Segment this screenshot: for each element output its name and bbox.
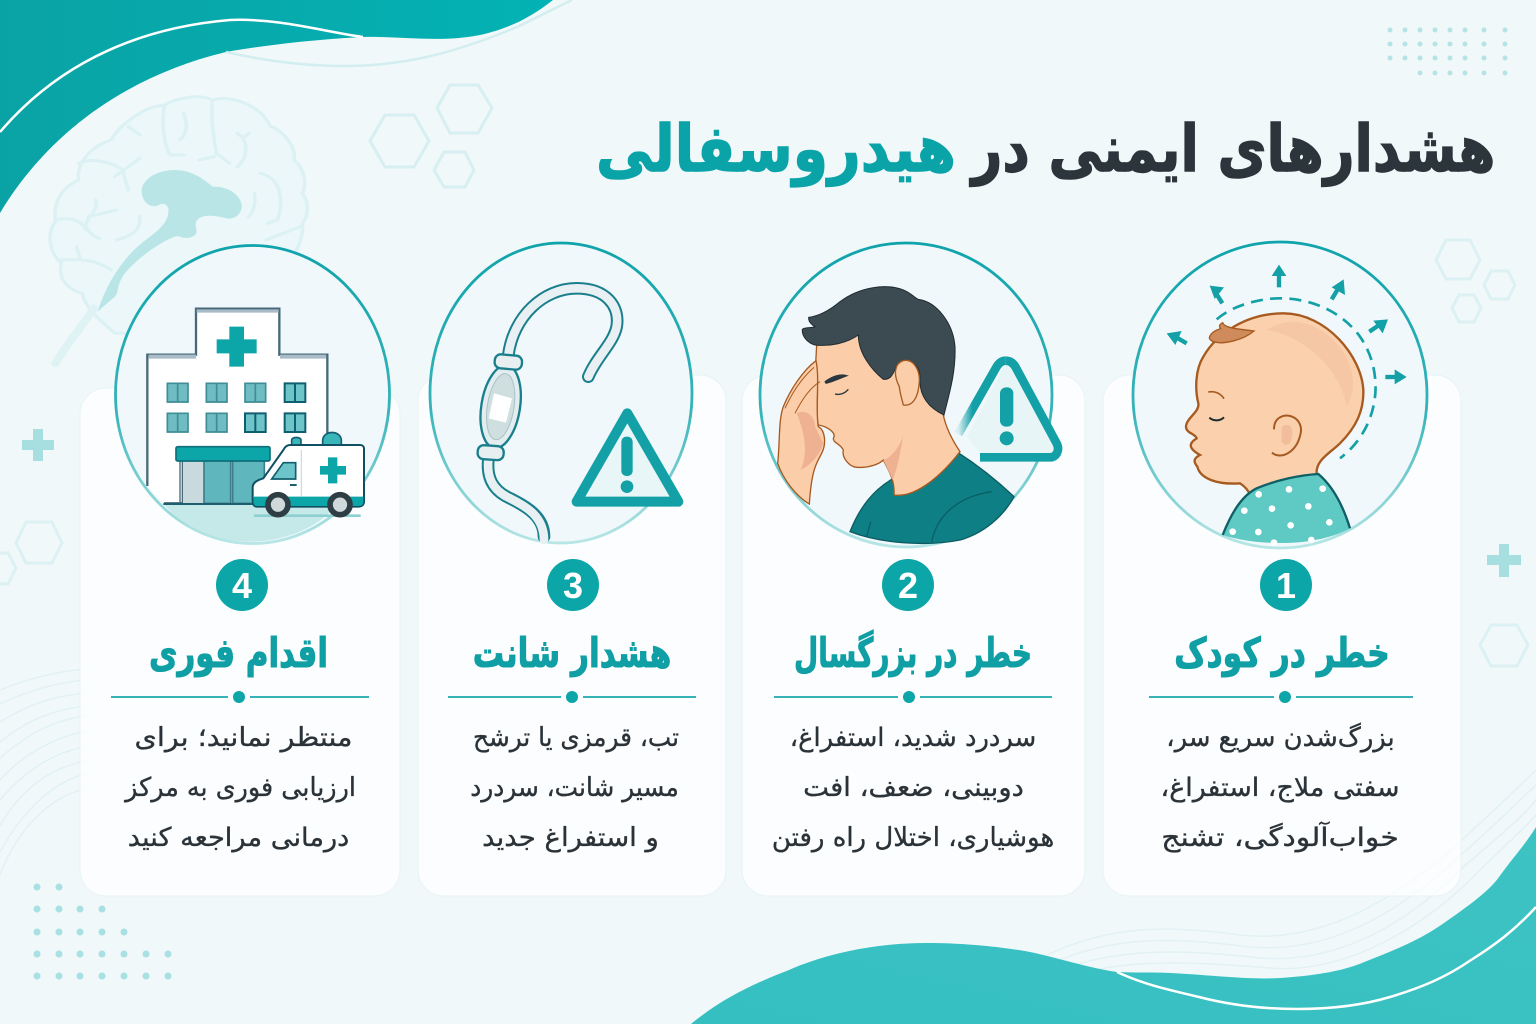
icon: baby with enlarging head [1167, 265, 1407, 546]
body text: درمانی مراجعه کنید [128, 823, 349, 853]
icon: man with headache and warning [778, 287, 1059, 543]
body text: خواب‌آلودگی، تشنج [1161, 822, 1399, 853]
body text [1161, 722, 1399, 853]
dot grid top-right [1388, 28, 1508, 76]
body text: سفتی ملاج، استفراغ، [1161, 772, 1399, 803]
title [596, 111, 1495, 187]
number badge 4 [216, 559, 268, 611]
body text: منتظر نمانید؛ برای [135, 723, 352, 753]
card background [80, 388, 400, 896]
body text: دوبینی، ضعف، افت [803, 773, 1024, 803]
body text: تب، قرمزی یا ترشح [473, 721, 679, 753]
number badge 1 [1260, 559, 1312, 611]
icon: shunt tube and warning [475, 288, 678, 540]
illustration ring [760, 243, 1052, 547]
body text [470, 721, 679, 853]
number badge 1: 1 [1276, 565, 1296, 606]
card background [418, 375, 726, 896]
number badge 4: 4 [232, 565, 252, 606]
panel: immediate action [80, 246, 400, 896]
number badge 2: 2 [898, 565, 918, 606]
body text: مسیر شانت، سردرد [470, 771, 679, 803]
divider [448, 691, 696, 703]
divider [774, 691, 1052, 703]
number badge 3: 3 [563, 565, 583, 606]
title: هشدارهای ایمنی در [969, 111, 1495, 186]
bottom-right wave [691, 827, 1536, 1024]
icon: hospital and ambulance [147, 309, 364, 542]
plus decorations [22, 429, 1521, 577]
illustration ring [430, 243, 692, 543]
divider [111, 691, 369, 703]
card title: اقدام فوری [149, 629, 328, 677]
faint arc lines bottom-left [0, 669, 85, 875]
top-left wave [0, 0, 572, 213]
body text: هوشیاری، اختلال راه رفتن [772, 823, 1054, 853]
body text [123, 723, 356, 853]
card title: هشدار شانت [473, 629, 671, 677]
panel: shunt warning [418, 243, 726, 896]
card title: خطر در کودک [1174, 629, 1390, 677]
dot grid bottom-left [34, 884, 172, 980]
card title: خطر در بزرگسال [794, 630, 1032, 678]
brain watermark [50, 97, 307, 363]
panel: adult danger [742, 243, 1085, 896]
body text: ارزیابی فوری به مرکز [123, 773, 356, 803]
card background [1103, 375, 1461, 896]
body text: سردرد شدید، استفراغ، [790, 723, 1036, 753]
illustration ring [116, 246, 390, 544]
number badge 2 [882, 559, 934, 611]
body text: و استفراغ جدید [482, 823, 659, 853]
body text: بزرگ‌شدن سریع سر، [1166, 722, 1395, 753]
title: هیدروسفالی [596, 113, 956, 187]
card background [742, 375, 1085, 896]
panel: child danger [1103, 242, 1461, 896]
hexagon decorations top [370, 85, 492, 187]
hexagon decorations side [0, 240, 1528, 666]
illustration ring [1133, 242, 1427, 548]
divider [1149, 691, 1413, 703]
number badge 3 [547, 559, 599, 611]
faint wave lines bottom-right [1047, 770, 1536, 970]
body text [772, 723, 1054, 853]
